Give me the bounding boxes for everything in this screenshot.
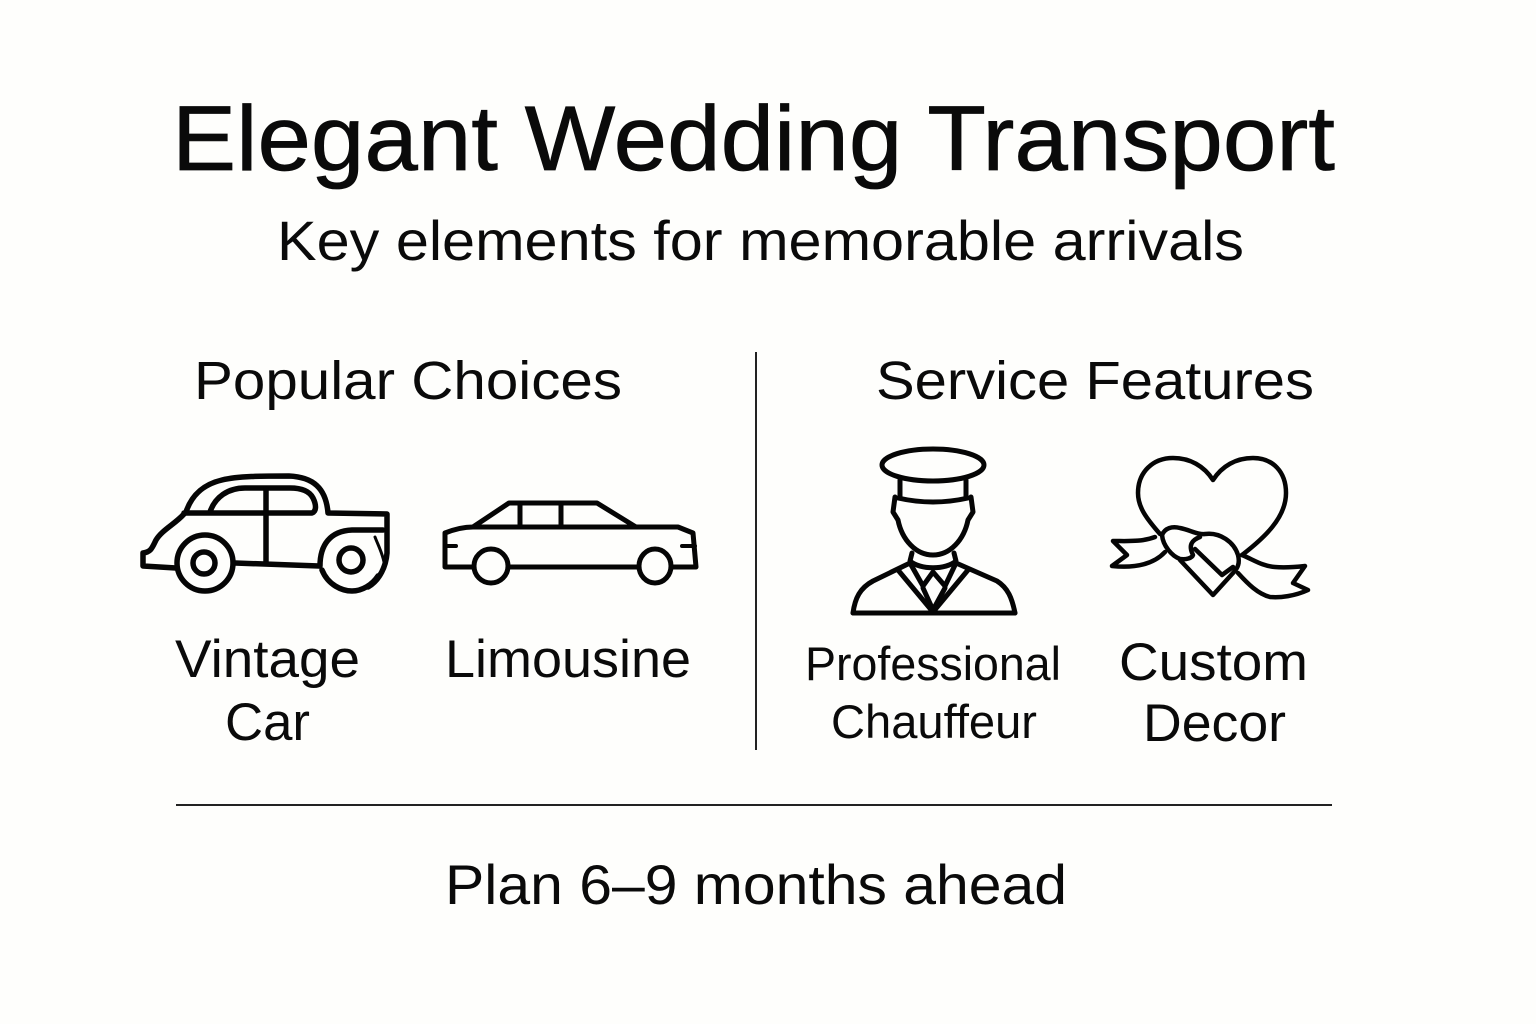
icon: limousine [445,503,696,583]
heading: popular choices: Popular Choices [194,351,622,411]
subtitle: Key elements for memorable arrivals [277,209,1244,272]
icon: vintage car [143,476,387,591]
label: custom decor [1119,633,1308,753]
icon: chauffeur [853,449,1015,613]
label: professional chauffeur: Chauffeur [831,695,1037,748]
label: professional chauffeur: Professional [805,637,1061,690]
label: vintage car: Vintage [175,630,360,689]
label: limousine: Limousine [445,630,691,689]
label: custom decor: Custom [1119,633,1308,692]
label: professional chauffeur [805,637,1061,748]
icon: heart with ribbon [1112,458,1308,597]
label: custom decor: Decor [1143,694,1286,753]
footer note: Plan 6–9 months ahead [445,853,1067,916]
title: Elegant Wedding Transport [172,88,1335,190]
label: vintage car: Car [225,693,310,752]
heading: service features: Service Features [876,351,1314,411]
label: vintage car [175,630,360,752]
